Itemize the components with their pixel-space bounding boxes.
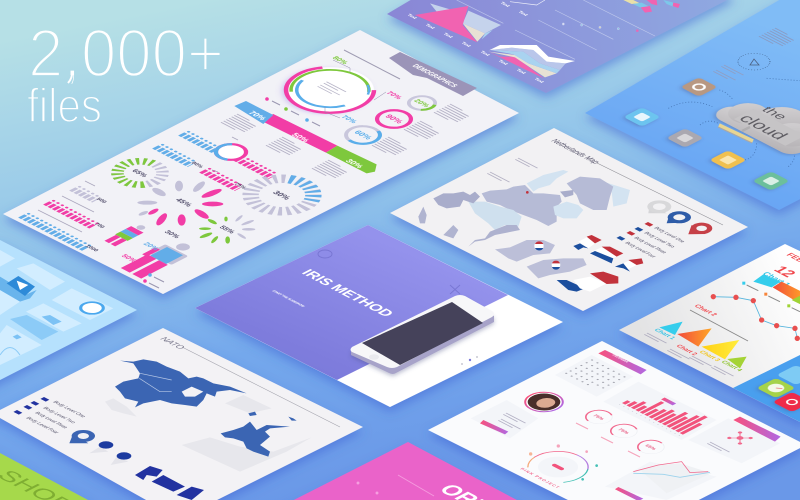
map: inset text streaks: [487, 158, 538, 184]
chart 2 heading: [690, 304, 748, 341]
chart: donut 90%: [370, 107, 418, 131]
chart: figure wreath 45%: [137, 180, 223, 227]
chart: spoke wreath 55%: 55%: [217, 225, 237, 235]
row caption streaks: [38, 137, 238, 232]
date: FEB 12: 12: [769, 264, 799, 280]
chart: wreath 65%: 65%: [130, 169, 149, 179]
heading streak: [344, 50, 400, 79]
band labels: 30%: [343, 158, 365, 169]
band labels: 50%: [289, 132, 311, 143]
chart: pink area chart: [415, 3, 501, 42]
heading ribbon: DEMOGRAPHICS: [389, 52, 477, 96]
triangle labels: Chart 2: [674, 344, 698, 357]
gauge: [498, 436, 618, 498]
panel: the cloud card: [585, 0, 800, 210]
callout: 70%: [374, 91, 404, 101]
chart: stacked bar: [742, 274, 800, 312]
date: FEB 12: [769, 252, 800, 280]
row values: 1000: [83, 244, 99, 253]
chart: layered area chart: [488, 45, 575, 78]
pagination dots: [461, 356, 478, 365]
profile text: [480, 413, 526, 434]
map title: Netherlands Map: [549, 138, 602, 165]
decorative marks: [318, 250, 460, 294]
chart 1 heading: Chart 1: [760, 271, 793, 288]
chart: donut 90%: 90%: [383, 113, 405, 125]
title: 2,000+ files: files: [27, 80, 102, 133]
dotted connectors: [668, 53, 800, 167]
icon: grey tile: [666, 128, 704, 148]
server bar: [718, 125, 753, 143]
icon: location pins: [647, 200, 712, 234]
legend: Body levels: Body Level Three: [632, 236, 668, 255]
icon: search tile: [680, 77, 718, 97]
figure callouts: 20%: [141, 242, 161, 252]
chart: pink bars: [619, 388, 712, 436]
callout: 80%: [330, 56, 350, 72]
chart: wreath 30%: 30%: [270, 189, 293, 201]
triangle labels: Chart 4: [719, 360, 743, 373]
panel: demographics card: [3, 30, 519, 294]
legend: Body levels: [616, 222, 686, 259]
progress rings: 65%: [643, 444, 658, 451]
panel: app UI card: [0, 240, 137, 390]
row values: 500: [94, 197, 108, 204]
cloud label: cloud: [734, 112, 792, 142]
progress rings: 75%: [616, 428, 631, 435]
panel: Shopping card: [0, 448, 95, 500]
progress rings: [577, 406, 673, 458]
icon: yellow tile: [709, 150, 747, 170]
flag ribbons: [573, 235, 643, 272]
cloud label: [734, 105, 792, 142]
panel: area charts card: [387, 0, 735, 93]
sub panels: [471, 355, 780, 500]
blue footer: [733, 352, 800, 425]
icon: cloud: [710, 90, 800, 157]
band labels: 70%: [246, 110, 268, 121]
calendar dots: [566, 360, 629, 393]
icon: small person in dotted circle: [750, 59, 759, 65]
figure callouts: [119, 230, 182, 264]
slide title: IRIS METHOD: [298, 267, 398, 319]
icon: light blue tile: [776, 365, 800, 385]
panel: pink slide card: [280, 442, 530, 500]
axis labels: Text: [517, 10, 530, 17]
icon: home tile: [623, 107, 661, 127]
figure: large person: [118, 238, 199, 280]
chart 2 heading: Chart 2: [692, 304, 719, 317]
panel: dashboard card: [428, 341, 800, 500]
chart: axis grid lines and dots: [457, 0, 655, 59]
axis labels: Text: [442, 32, 455, 39]
band: 70 50 30 percent ribbon: [234, 101, 377, 173]
gauge label: PINK PROJECT: [519, 467, 561, 489]
title: 2,000+ files: 2,000+: [28, 16, 224, 92]
triangle labels: [652, 328, 743, 373]
chart: donut 60%: [332, 119, 394, 151]
axis labels: Text: [460, 41, 473, 48]
ring captions: [576, 423, 640, 457]
cloud label: the: [758, 105, 791, 122]
slide marks: [357, 475, 434, 496]
row values: 75%: [232, 182, 247, 190]
band labels: [246, 110, 365, 169]
panel: NATO card: [0, 328, 363, 500]
people rows: [21, 131, 277, 249]
panel: Netherlands map card: [390, 128, 748, 311]
panel: colourful charts card: [619, 244, 800, 425]
axis labels: Text: [424, 23, 437, 30]
chart: donut 60%: 60%: [352, 129, 374, 141]
header bar: calendar: [598, 350, 647, 374]
figure legend: [143, 273, 164, 288]
chart: wreath 30%: [221, 164, 343, 226]
chart: figure wreath 45%: 45%: [173, 197, 195, 208]
axis labels: Text: [406, 13, 419, 20]
UI panels: [0, 250, 113, 365]
chart: stacked legend bars: [623, 0, 680, 13]
axis labels: Text: [515, 68, 528, 75]
header bar: calendar: CALENDAR: [611, 354, 630, 364]
panel: Iris Method card: [195, 225, 563, 407]
map: North America and Europe: [105, 359, 312, 472]
hub caption: [707, 442, 730, 454]
icon: pins: [69, 430, 131, 465]
heading ribbon: DEMOGRAPHICS: DEMOGRAPHICS: [410, 63, 460, 89]
progress rings: 75%: [591, 414, 606, 421]
slide subtitle: START THE SLIDESHOW: [271, 290, 306, 308]
axis labels: Text: [533, 77, 546, 84]
text streaks on cloud card: [713, 28, 796, 82]
figure callouts: 30%: [162, 230, 182, 240]
row values: [83, 161, 247, 253]
icon: green tile: [752, 171, 790, 191]
chart: wreath 65%: [95, 150, 185, 196]
axis labels: [406, 1, 546, 84]
icon: phone: [350, 295, 494, 374]
map title: NATO: [158, 336, 187, 351]
chart: triangles: [659, 322, 747, 368]
callout: 70%: 70%: [384, 91, 404, 101]
icon: clock tile: [756, 378, 796, 398]
axis labels: Text: [479, 50, 492, 57]
chart: donut 20%: [397, 90, 447, 116]
legend: Body levels: Body Level Two: [642, 231, 676, 249]
ring gauge: [76, 300, 108, 316]
legend: Body levels: [13, 397, 87, 435]
callout: 70% blue: [325, 107, 359, 125]
chart: small donut: [202, 137, 260, 167]
callout: 80%: 80%: [330, 56, 350, 66]
chart: donut 20%: 20%: [412, 99, 431, 109]
legend: Body levels: Body Level Three: [33, 411, 69, 430]
figure: striped person: [104, 223, 150, 247]
icon: network hub: [727, 431, 753, 445]
avatar: [517, 388, 571, 416]
flag ribbons: [135, 466, 204, 500]
chart: main ring: [242, 45, 418, 135]
map: marker flags: [526, 191, 560, 270]
triangle labels: Chart 3: [697, 350, 721, 363]
triangle captions: [644, 333, 734, 378]
flag map: tricolour: [557, 272, 618, 292]
legend: Body levels: Body Level Four: [24, 416, 60, 435]
row values: 700: [92, 222, 106, 229]
legend dots: [265, 97, 320, 126]
map: Netherlands regions: [418, 170, 630, 278]
video thumbnail with play icon: [0, 276, 37, 302]
legend: Body levels: Body Level One: [652, 226, 686, 244]
axis labels: Text: [499, 1, 512, 8]
axis labels: Text: [497, 59, 510, 66]
chart: spoke wreath 55%: [199, 214, 255, 244]
chart: line with red points: [711, 294, 800, 341]
gauge markers: [529, 444, 598, 481]
legend: Body levels: Body Level One: [51, 400, 87, 419]
triangle labels: Chart 1: [652, 328, 676, 341]
legend: Body levels: Body Level Two: [41, 406, 77, 425]
icon: red tile: [772, 392, 800, 412]
chart: line chart: [615, 462, 712, 500]
text blocks: [221, 104, 471, 179]
title: 2,000+ files: [27, 16, 224, 133]
callout: 70% blue: 70%: [339, 115, 359, 125]
row values: 80%: [189, 161, 204, 169]
legend: Body levels: Body Level Four: [623, 241, 657, 259]
header bar: top right: [733, 417, 781, 442]
figure callouts: 50%: [119, 254, 139, 264]
